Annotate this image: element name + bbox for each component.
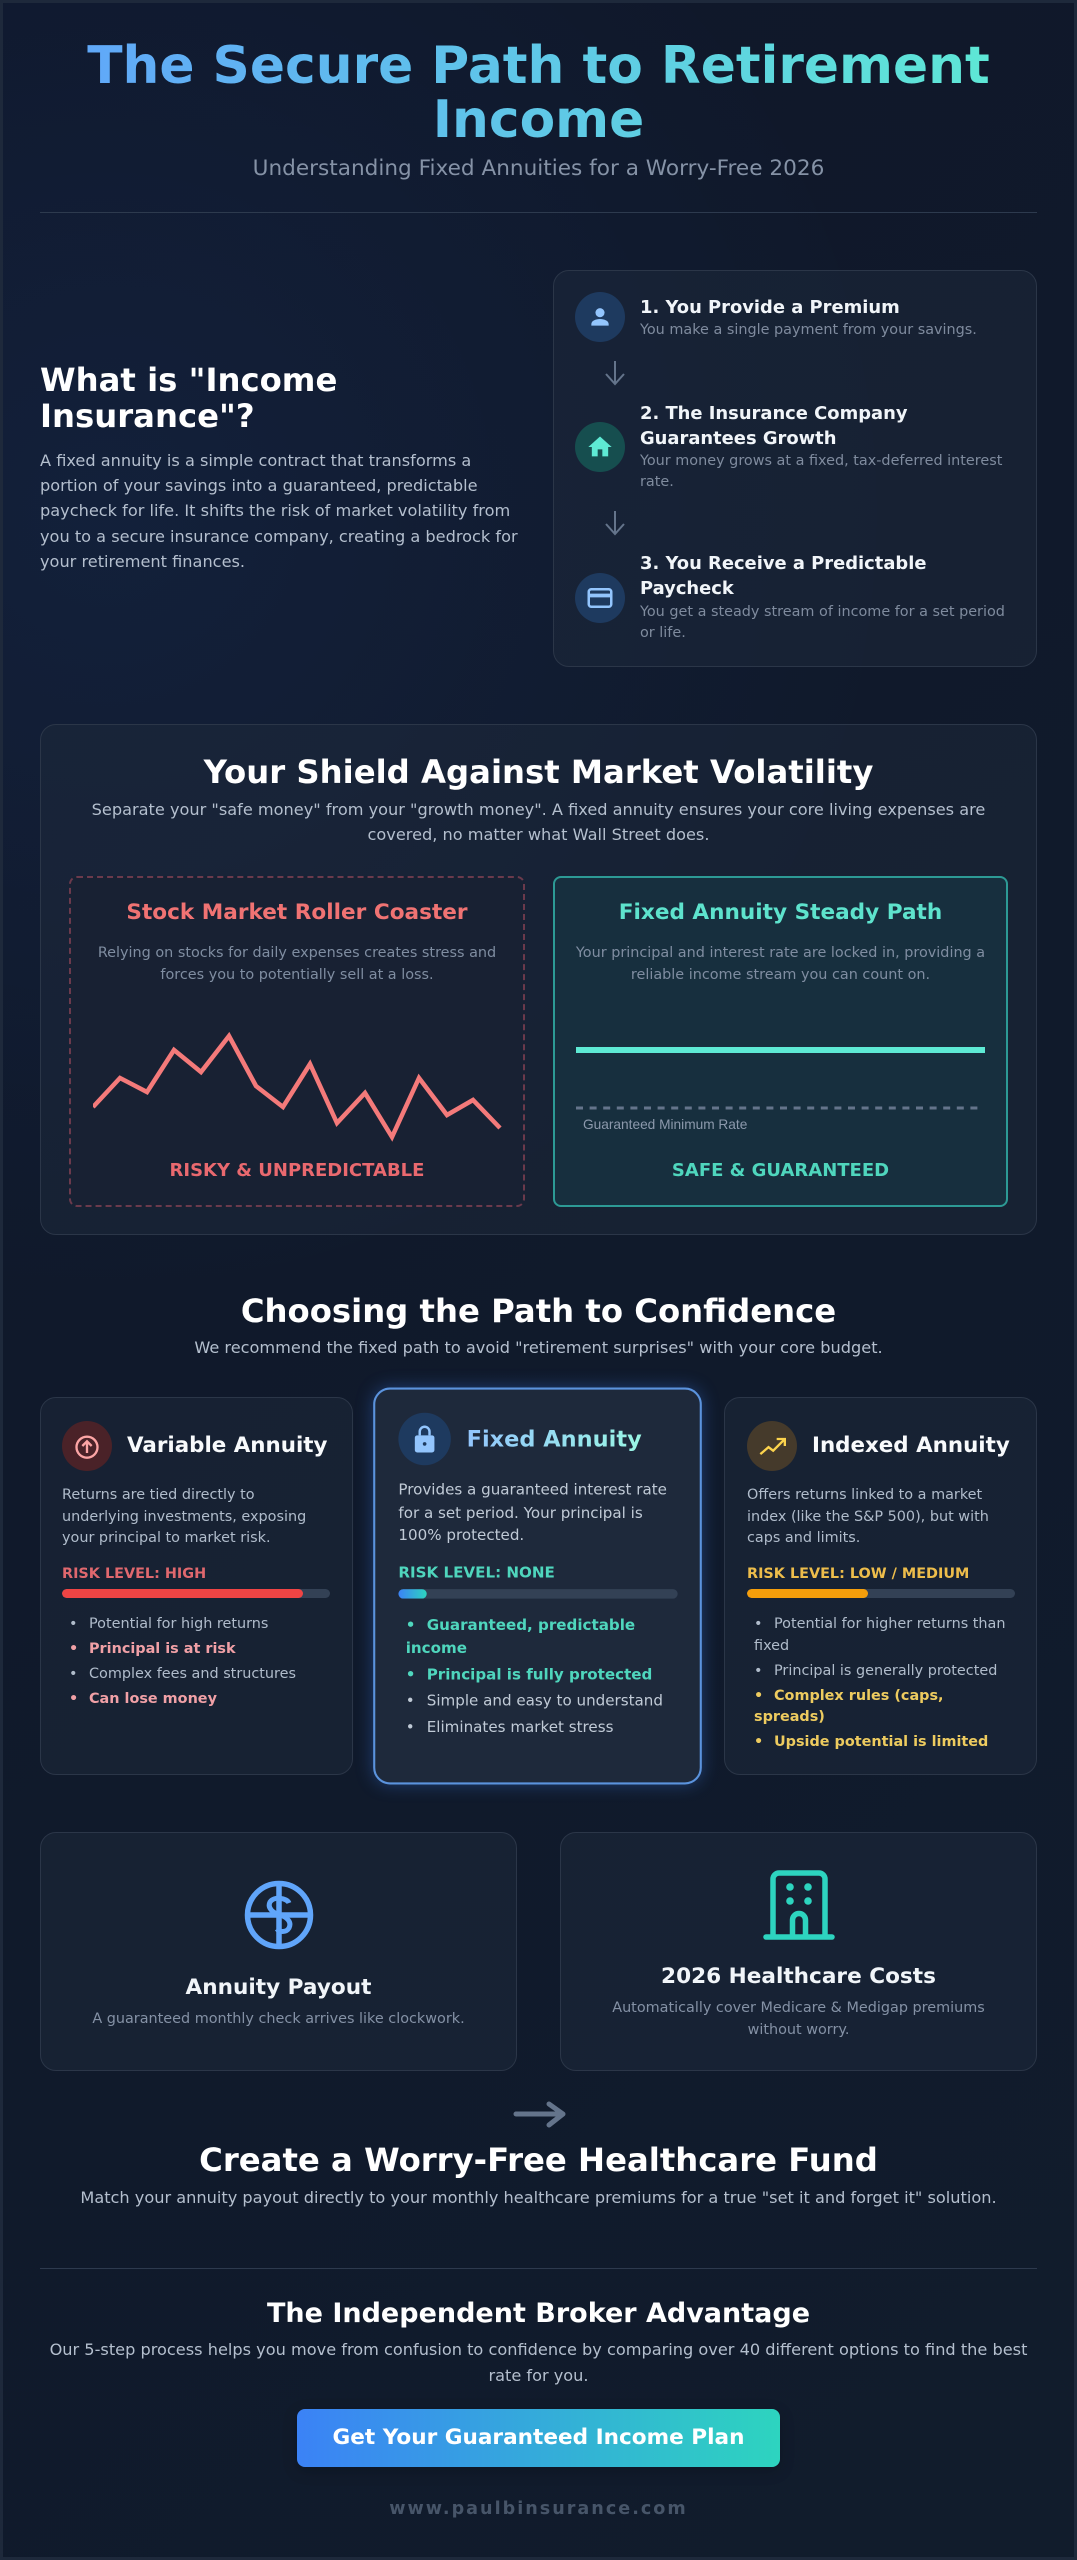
text: income insurance explanation: portion of your savings into a guaranteed, predictable xyxy=(40,476,478,495)
subtitle: Understanding Fixed Annuities for a Worry-Free 2026 xyxy=(253,156,824,180)
card description: A guaranteed monthly check arrives like clockwork. xyxy=(92,2011,465,2027)
panel: three steps xyxy=(553,270,1037,667)
title: Income xyxy=(433,90,644,150)
heading: what is income insurance: What is "Income xyxy=(40,361,337,399)
button: call to action: Get Your Guaranteed Income Plan xyxy=(333,2425,744,2450)
risky label: RISKY & UNPREDICTABLE xyxy=(170,1160,424,1181)
description: your principal to market risk. xyxy=(62,1530,271,1546)
risk level label: RISK LEVEL: HIGH xyxy=(62,1566,206,1582)
feature list xyxy=(406,1618,663,1736)
step 2 description: rate. xyxy=(640,474,674,490)
description: Returns are tied directly to xyxy=(62,1487,255,1503)
feature list: Guaranteed, predictable xyxy=(427,1618,635,1634)
heading: choosing the path: Choosing the Path to Confidence xyxy=(241,1292,836,1330)
feature list: Potential for high returns xyxy=(89,1616,268,1632)
card description: Automatically cover Medicare & Medigap premiums xyxy=(612,2000,985,2016)
card title: Stock Market Roller Coaster xyxy=(126,900,468,925)
icon: lock xyxy=(398,1413,451,1465)
arrow: right xyxy=(514,2102,566,2128)
step 2 title xyxy=(640,403,908,449)
risk bar xyxy=(398,1589,678,1599)
step 3 description: You get a steady stream of income for a set period xyxy=(640,604,1005,620)
risk level label: RISK LEVEL: NONE xyxy=(398,1565,555,1582)
feature list: income xyxy=(406,1640,467,1657)
description: for a set period. Your principal is xyxy=(398,1505,643,1522)
description xyxy=(62,1487,306,1546)
feature list: Can lose money xyxy=(89,1691,217,1707)
icon: person xyxy=(575,292,625,342)
intro text xyxy=(92,800,985,844)
feature list: Simple and easy to understand xyxy=(427,1693,663,1709)
safe label: SAFE & GUARANTEED xyxy=(672,1160,889,1181)
text: income insurance explanation: you to a secure insurance company, creating a bedrock for xyxy=(40,527,518,546)
description: index (like the S&P 500), but with xyxy=(747,1509,989,1525)
card: stock market xyxy=(69,876,525,1207)
step 2 title: Guarantees Growth xyxy=(640,428,836,449)
feature list: Complex fees and structures xyxy=(89,1666,296,1682)
card description: without worry. xyxy=(748,2022,849,2038)
icon: house xyxy=(575,422,625,472)
step 3 title xyxy=(640,553,926,599)
card: indexed annuity xyxy=(724,1397,1037,1775)
step 3 description: or life. xyxy=(640,625,686,641)
heading: Your Shield Against Market Volatility xyxy=(204,753,873,791)
feature list: Upside potential is limited xyxy=(774,1734,988,1750)
step 3 description xyxy=(640,604,1005,641)
step 2 description: Your money grows at a fixed, tax-deferred interest xyxy=(640,453,1002,469)
card description: Your principal and interest rate are locked in, providing a xyxy=(576,945,985,961)
feature list: Complex rules (caps, xyxy=(774,1688,944,1704)
risk bar xyxy=(747,1589,1015,1598)
title xyxy=(87,36,990,150)
icon: arrow up circle xyxy=(62,1421,112,1471)
title: The Secure Path to Retirement xyxy=(87,36,990,96)
text: income insurance explanation: A fixed annuity is a simple contract that transforms a xyxy=(40,451,471,470)
card title: Variable Annuity xyxy=(127,1433,327,1458)
feature list: Principal is fully protected xyxy=(427,1666,652,1683)
card: fixed annuity xyxy=(373,1388,702,1784)
card: annuity payout xyxy=(40,1832,517,2071)
line chart: volatile xyxy=(93,1032,502,1142)
card description xyxy=(98,945,496,983)
card description xyxy=(612,2000,985,2038)
feature list xyxy=(71,1616,296,1707)
step 2 description xyxy=(640,453,1002,490)
text: income insurance explanation xyxy=(40,451,518,571)
heading: what is income insurance xyxy=(40,361,337,435)
card description: forces you to potentially sell at a loss. xyxy=(160,967,434,983)
card title: Fixed Annuity xyxy=(467,1426,642,1453)
arrow: down 2 xyxy=(605,511,625,536)
heading: independent broker advantage: The Independent Broker Advantage xyxy=(267,2298,810,2329)
card title: Annuity Payout xyxy=(186,1975,371,2000)
intro text: Separate your "safe money" from your "growth money". A fixed annuity ensures your core living expenses are xyxy=(92,800,985,819)
icon: credit card xyxy=(575,573,625,623)
heading: worry-free healthcare fund: Create a Worry-Free Healthcare Fund xyxy=(199,2141,878,2179)
text: broker process: rate for you. xyxy=(488,2366,589,2385)
step 3 title: Paycheck xyxy=(640,578,734,599)
text: broker process xyxy=(50,2340,1028,2385)
button: call to action xyxy=(297,2409,780,2467)
feature list: Potential for higher returns than xyxy=(774,1616,1005,1632)
feature list: Principal is at risk xyxy=(89,1641,236,1657)
card description: reliable income stream you can count on. xyxy=(631,967,930,983)
description: caps and limits. xyxy=(747,1530,860,1546)
card: variable annuity xyxy=(40,1397,353,1775)
step 1 description: You make a single payment from your savings. xyxy=(640,322,977,338)
heading: what is income insurance: Insurance"? xyxy=(40,397,255,435)
description: Offers returns linked to a market xyxy=(747,1487,982,1503)
card title: Indexed Annuity xyxy=(812,1433,1010,1458)
subheading: choosing the path: We recommend the fixed path to avoid "retirement surprises" with your core budget. xyxy=(194,1338,883,1357)
icon: building xyxy=(763,1870,835,1940)
description: 100% protected. xyxy=(398,1527,524,1544)
feature list: fixed xyxy=(754,1638,789,1654)
text: broker process: Our 5-step process helps you move from confusion to confidence by comparing over 40 different options to find the best xyxy=(50,2340,1027,2359)
feature list: spreads) xyxy=(754,1709,825,1725)
description xyxy=(398,1482,667,1544)
card: healthcare costs xyxy=(560,1832,1037,2071)
text: income insurance explanation: paycheck for life. It shifts the risk of market volatility from xyxy=(40,501,510,520)
card title: Fixed Annuity Steady Path xyxy=(619,900,942,925)
feature list xyxy=(754,1616,1005,1750)
card: fixed annuity xyxy=(553,876,1008,1207)
icon: dollar globe xyxy=(244,1880,314,1950)
risk level label: RISK LEVEL: LOW / MEDIUM xyxy=(747,1566,969,1582)
description xyxy=(747,1487,989,1546)
feature list: Principal is generally protected xyxy=(774,1663,997,1679)
text: income insurance explanation: your retirement finances. xyxy=(40,552,245,571)
feature list: Eliminates market stress xyxy=(427,1719,613,1736)
description: underlying investments, exposing xyxy=(62,1509,306,1525)
card description xyxy=(576,945,985,983)
step 1 title: 1. You Provide a Premium xyxy=(640,297,900,318)
description: Provides a guaranteed interest rate xyxy=(398,1482,667,1499)
intro text: covered, no matter what Wall Street does. xyxy=(368,825,709,844)
panel: shield against market volatility xyxy=(40,724,1037,1235)
risk bar xyxy=(62,1589,330,1598)
icon: trending up xyxy=(747,1421,797,1471)
card title: 2026 Healthcare Costs xyxy=(661,1964,936,1989)
arrow: down 1 xyxy=(605,361,625,386)
card description: Relying on stocks for daily expenses creates stress and xyxy=(98,945,496,961)
text: healthcare fund: Match your annuity payout directly to your monthly healthcare premiums for a true "set it and forget it" solution. xyxy=(80,2188,997,2207)
step 3 title: 3. You Receive a Predictable xyxy=(640,553,926,574)
step 2 title: 2. The Insurance Company xyxy=(640,403,908,424)
footer website: www.paulbinsurance.com xyxy=(389,2499,688,2519)
